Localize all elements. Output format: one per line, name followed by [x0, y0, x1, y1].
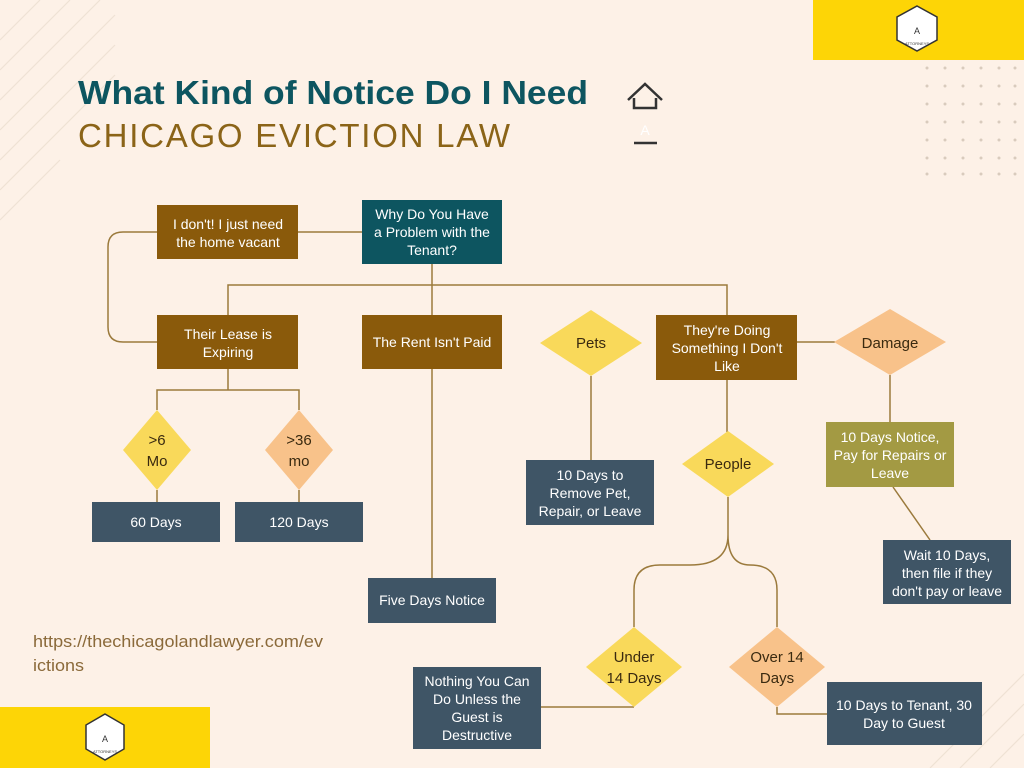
box: doing something: Something I Don't [672, 340, 783, 356]
diamond: people [682, 431, 774, 497]
box: nothing you can do [413, 667, 541, 749]
top right yellow banner with logo: ATTORNEYS [905, 41, 929, 46]
box: 60 days: 60 Days [130, 514, 182, 530]
box: five days notice [368, 578, 496, 623]
box: nothing you can do: Destructive [442, 727, 512, 743]
diamond: pets [540, 310, 642, 376]
diamond: over 14 days: Over 14 [750, 649, 804, 666]
diamond: over 14 days [729, 627, 825, 707]
diamond: damage [834, 309, 946, 375]
box: lease expiring: Expiring [203, 344, 253, 360]
box: 10 days to tenant: 10 Days to Tenant, 30 [836, 697, 972, 713]
diamond: under 14 days: Under [614, 649, 654, 666]
diamond: damage: Damage [862, 335, 918, 352]
box: 120 days [235, 502, 363, 542]
box: damage notice [826, 422, 954, 487]
box: I don't: I don't! I just need [173, 216, 283, 232]
top right yellow banner with logo: A [914, 26, 920, 36]
box: nothing you can do: Guest is [451, 709, 503, 725]
box: pets result: Repair, or Leave [539, 503, 642, 519]
box: 10 days to tenant: Day to Guest [863, 715, 945, 731]
url text [33, 632, 324, 675]
box: why: Tenant? [407, 242, 457, 258]
top right yellow banner with logo [813, 0, 1024, 60]
diamond: >36 mo: >36 [286, 432, 312, 449]
diamond: over 14 days: Days [760, 670, 794, 687]
diamond: under 14 days: 14 Days [606, 670, 662, 687]
box: wait 10 days: Wait 10 Days, [904, 547, 990, 563]
icon: house logo [628, 84, 662, 143]
box: damage notice: Pay for Repairs or [834, 447, 947, 463]
box: damage notice: Leave [871, 465, 909, 481]
box: 60 days [92, 502, 220, 542]
box: damage notice: 10 Days Notice, [841, 429, 939, 445]
box: wait 10 days: don't pay or leave [892, 583, 1002, 599]
diamond: >6 Mo: >6 [148, 432, 166, 449]
box: I don't: the home vacant [176, 234, 280, 250]
bottom left yellow banner with logo [0, 707, 210, 768]
diamond: >6 Mo: Mo [147, 453, 167, 470]
url text: ictions [33, 656, 84, 675]
subtitle: CHICAGO EVICTION LAW [78, 117, 511, 154]
diamond: >36 mo: mo [289, 453, 309, 470]
diamond: pets: Pets [576, 335, 606, 352]
box: 10 days to tenant [827, 682, 982, 745]
box: nothing you can do: Nothing You Can [424, 673, 530, 689]
box: why: Why Do You Have [375, 206, 489, 222]
box: why: a Problem with the [374, 224, 490, 240]
bottom left yellow banner with logo: A [102, 734, 108, 744]
box: pets result: Remove Pet, [550, 485, 630, 501]
box: lease expiring: Their Lease is [184, 326, 272, 342]
box: why [362, 200, 502, 264]
box: doing something: Like [714, 358, 740, 374]
icon: house logo: A [640, 122, 650, 138]
diamond: under 14 days [586, 627, 682, 707]
bottom left yellow banner with logo: ATTORNEYS [93, 749, 117, 754]
box: pets result: 10 Days to [557, 467, 624, 483]
box: pets result [526, 460, 654, 525]
box: doing something: They're Doing [684, 322, 770, 338]
title: What Kind of Notice Do I Need [78, 74, 588, 111]
diamond: people: People [705, 456, 751, 473]
connector lines [108, 232, 930, 714]
diamond: >36 mo [265, 410, 333, 490]
box: doing something [656, 315, 797, 380]
box: wait 10 days [883, 540, 1011, 604]
box: five days notice: Five Days Notice [379, 592, 485, 608]
box: nothing you can do: Do Unless the [433, 691, 521, 707]
box: lease expiring [157, 315, 298, 369]
box: rent [362, 315, 502, 369]
url text: https://thechicagolandlawyer.com/ev [33, 632, 324, 651]
box: 120 days: 120 Days [269, 514, 329, 530]
box: wait 10 days: then file if they [902, 565, 992, 581]
diamond: >6 Mo [123, 410, 191, 490]
box: rent: The Rent Isn't Paid [373, 334, 491, 350]
box: I don't [157, 205, 298, 259]
